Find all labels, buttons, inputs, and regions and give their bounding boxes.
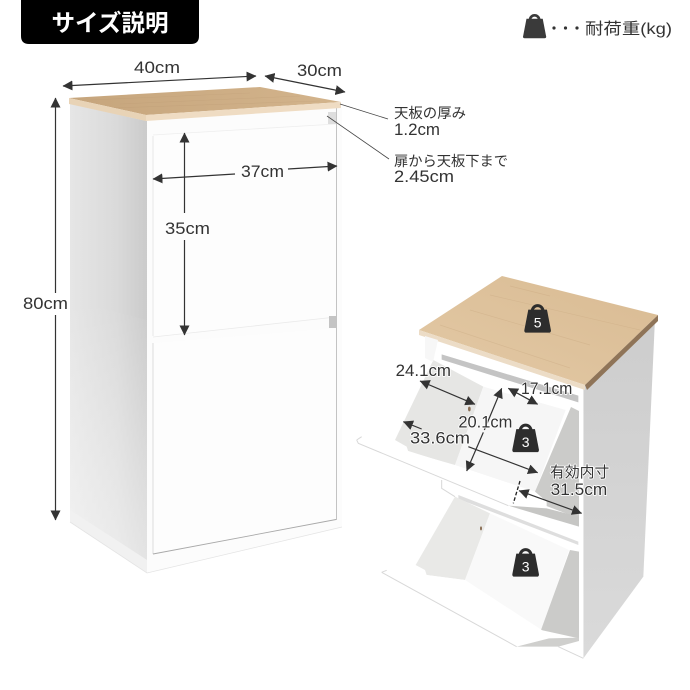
dimension: 17.1cm xyxy=(508,379,572,404)
dimension: door height 35cm: 35cm xyxy=(165,219,210,238)
open flap door xyxy=(382,570,549,647)
lower compartment xyxy=(382,480,583,658)
icon: weight bag xyxy=(523,15,546,38)
dimension: width 40cm xyxy=(63,58,256,86)
interior dimensions xyxy=(396,361,609,513)
divider between compartments xyxy=(458,495,578,545)
icon: load bag 3kg upper xyxy=(512,425,539,452)
dimension: 33.6cm xyxy=(403,422,538,473)
callout: top board thickness xyxy=(340,104,466,139)
icon: load bag 5kg: 5 xyxy=(534,314,542,330)
compartment floor xyxy=(455,387,566,492)
flap side wedge xyxy=(541,550,579,638)
flap outline xyxy=(382,570,517,647)
callout: door to top board gap xyxy=(327,116,508,186)
wooden top board xyxy=(69,87,341,121)
legend: load capacity xyxy=(523,15,672,38)
upper compartment xyxy=(357,360,579,527)
title tab: サイズ説明 xyxy=(52,9,168,36)
compartment left wall xyxy=(416,497,490,580)
flap outline xyxy=(357,437,508,506)
compartment floor xyxy=(465,513,569,630)
callout: door to top board gap: 2.45cm xyxy=(394,167,454,186)
icon: load bag 3kg lower xyxy=(512,550,539,577)
cabinet side panel xyxy=(70,104,147,573)
right cabinet wooden top board xyxy=(419,276,658,390)
upper door xyxy=(153,112,336,337)
callout: door to top board gap: 扉から天板下まで xyxy=(394,153,508,170)
lower door xyxy=(153,108,336,554)
cabinet side panel xyxy=(583,318,655,658)
cabinet foot outline xyxy=(558,647,583,658)
left cabinet: front view xyxy=(69,87,342,573)
dimension: effective inner width 31.5cm: 31.5cm xyxy=(551,480,607,499)
screw hole xyxy=(468,407,471,411)
icon: load bag 3kg lower: 3 xyxy=(522,558,530,574)
callout: top board thickness: 1.2cm xyxy=(394,120,440,139)
dimension: 24.1cm xyxy=(396,361,475,404)
dimension: door width 37cm: 37cm xyxy=(241,162,284,181)
dimension: height 80cm: 80cm xyxy=(23,294,68,313)
callout: top board thickness: 天板の厚み xyxy=(394,105,466,122)
right cabinet: open view xyxy=(357,318,655,658)
flap side wedge xyxy=(535,407,579,518)
dimension: 17.1cm: 17.1cm xyxy=(521,379,572,398)
compartment left wall xyxy=(395,360,483,465)
cabinet front frame xyxy=(147,108,342,573)
dimension: 24.1cm: 24.1cm xyxy=(396,361,451,380)
dimension: width 40cm: 40cm xyxy=(134,58,180,77)
flap lower shadow xyxy=(517,638,579,647)
legend text: 耐荷重(kg) xyxy=(585,20,672,38)
dimension: 20.1cm xyxy=(458,388,512,471)
dimension: depth 30cm: 30cm xyxy=(297,61,342,80)
shadow below top board xyxy=(442,354,578,402)
screw hole xyxy=(480,526,482,530)
open flap door xyxy=(357,437,547,508)
flap lower shadow xyxy=(508,506,579,527)
icon: load bag 5kg xyxy=(524,306,551,333)
legend text xyxy=(552,20,672,38)
dimension: 20.1cm: 20.1cm xyxy=(458,413,512,432)
cabinet base outline xyxy=(70,522,342,573)
dimension: 33.6cm: 33.6cm xyxy=(410,429,470,448)
icon: load bag 3kg upper: 3 xyxy=(522,434,530,450)
cabinet front frame xyxy=(424,335,583,658)
divider left edge xyxy=(442,480,455,497)
dimension: effective inner width 31.5cm: 有効内寸 xyxy=(550,464,609,481)
dimension: effective inner width 31.5cm xyxy=(513,464,609,513)
dimension: depth 30cm xyxy=(265,61,345,92)
title tab xyxy=(21,0,199,44)
dimension: door width 37cm xyxy=(153,162,337,181)
